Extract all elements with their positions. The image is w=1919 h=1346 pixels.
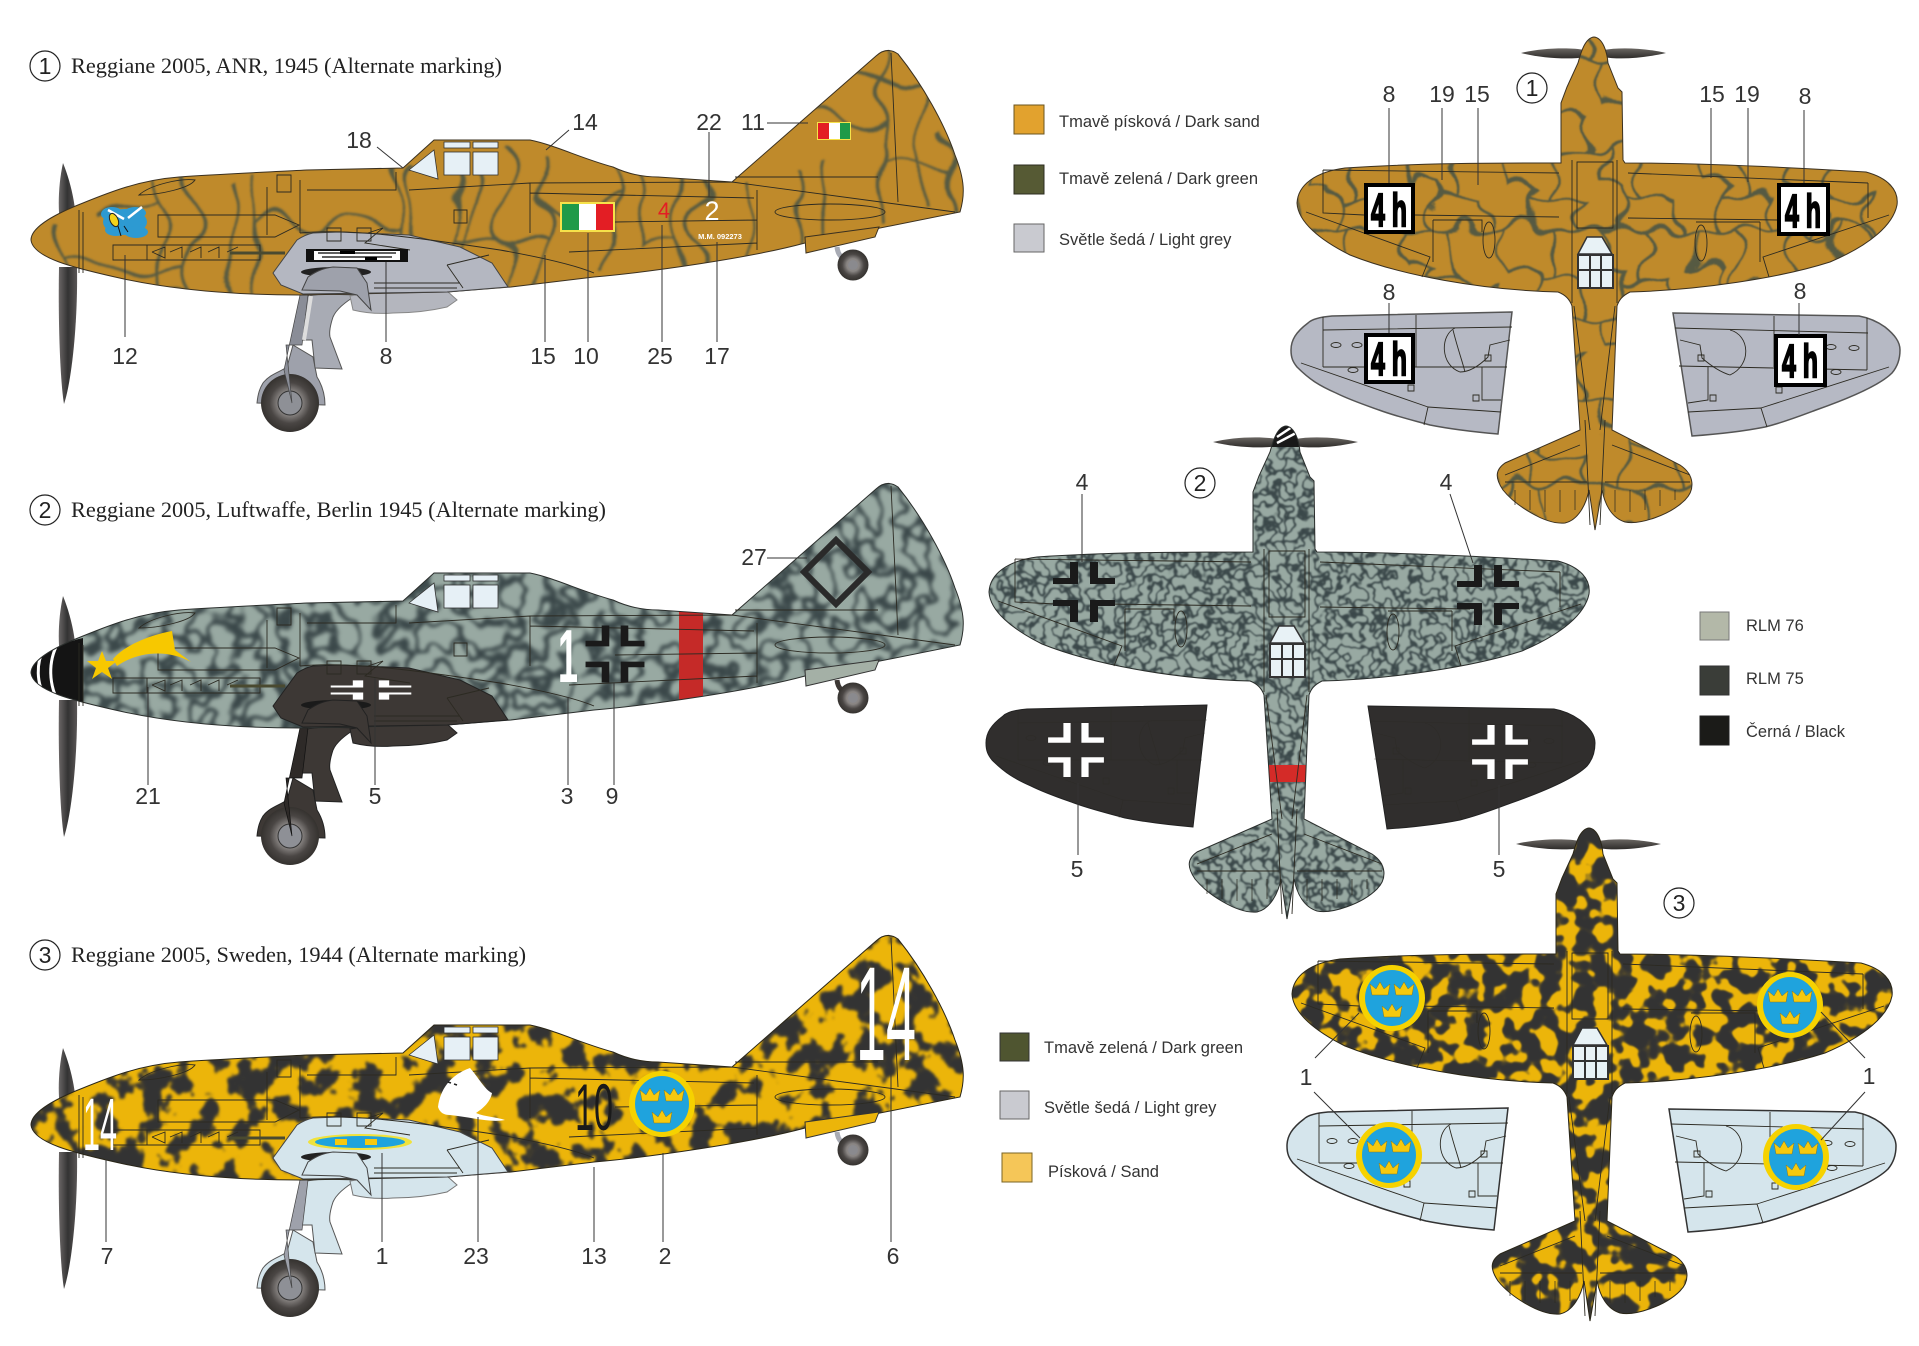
panel: profile 2 side view, grey mottled camouflage: 1 — [558, 614, 578, 698]
radiator under wing — [350, 724, 457, 746]
icon: Italian flag on fin — [817, 122, 851, 140]
tailplane — [805, 227, 879, 253]
marking: roundel, right wing — [1757, 972, 1823, 1038]
marking: roundel, left wing — [1359, 965, 1425, 1031]
tailplane — [805, 1112, 879, 1138]
airframe outline and panel lines — [1297, 37, 1897, 530]
heading: profile 2: Reggiane 2005, Luftwaffe, Berlin 1945 (Alternate marking) — [71, 497, 606, 522]
heading: profile 3: Reggiane 2005, Sweden, 1944 (Alternate marking) — [71, 942, 526, 967]
icon: propeller blades — [59, 596, 77, 837]
panel: profile 2 top view — [982, 419, 1602, 924]
marking: black diamond on fin — [804, 540, 868, 604]
callouts: profile 3 side view: 6 — [887, 1243, 899, 1269]
icon: tail wheel — [837, 1132, 868, 1166]
legend: profile 3 colours: Tmavě zelená / Dark green — [1044, 1039, 1243, 1057]
panel: profile 3 side view, yellow and dark blotches: 14 — [856, 940, 916, 1089]
icon: landing gear, wheel and door — [257, 1179, 357, 1317]
under wing, left, light grey: 4 h — [1371, 333, 1407, 385]
callouts: profile 2 top view: 4 — [1076, 469, 1089, 495]
wing fairing, pale blue — [273, 1117, 508, 1179]
callouts: profile 2 side view: 5 — [369, 783, 381, 809]
canopy — [1578, 237, 1613, 288]
callouts: profile 1 top view: 1 — [1526, 75, 1538, 101]
fuselage outline — [31, 483, 963, 728]
callouts: profile 3 top view: 3 — [1673, 890, 1685, 916]
icon: landing gear, wheel and door — [257, 727, 357, 865]
legend: profile 2 colours: RLM 76 — [1746, 617, 1804, 635]
fuselage camouflage — [20, 473, 970, 733]
icon: landing gear, wheel and door — [257, 294, 357, 432]
callouts: profile 3 top view: 1 — [1863, 1063, 1875, 1089]
legend: profile 1 colours: Tmavě zelená / Dark green — [1059, 170, 1258, 188]
icon: Italian flag on fuselage — [560, 202, 615, 232]
canopy — [1270, 626, 1305, 677]
heading: profile 3: 3 — [39, 942, 51, 968]
canopy glazing — [409, 1027, 498, 1064]
heading: profile 1: 1 — [39, 53, 51, 79]
callouts: profile 2 top view: 2 — [1194, 470, 1206, 496]
marking: flattened roundel on fairing — [308, 1134, 412, 1150]
under wing, right, black — [1368, 706, 1595, 829]
marking: white ghost badge — [438, 1068, 505, 1121]
panel lines — [79, 938, 955, 1173]
panel lines — [79, 486, 955, 721]
airframe camouflage — [1285, 821, 1905, 1326]
fuselage outline — [31, 935, 963, 1180]
icon: propeller blades — [59, 1048, 77, 1289]
canopy glazing — [409, 575, 498, 612]
fuselage numbers and serial: 4 — [658, 198, 670, 223]
marking: fuselage cross — [586, 626, 644, 682]
callouts: profile 1 top view — [1383, 73, 1811, 335]
callouts: profile 1 top view: 15 — [1464, 81, 1490, 107]
panel: profile 3 top view — [1285, 821, 1905, 1326]
legend: profile 1 colours — [1014, 105, 1260, 252]
callouts: profile 2 side view: 9 — [606, 783, 618, 809]
airframe outline and panel lines — [989, 426, 1589, 919]
radiator under wing — [350, 291, 457, 313]
heading: profile 2: 2 — [39, 497, 51, 523]
panel: profile 3 side view, yellow and dark blotches: 14 — [83, 1083, 117, 1166]
marking: wing code square, left — [1366, 184, 1413, 236]
callouts: profile 3 side view: 1 — [376, 1243, 388, 1269]
callouts: profile 3 side view: 2 — [659, 1243, 671, 1269]
callouts: profile 2 top view: 4 — [1440, 469, 1453, 495]
airframe camouflage — [1290, 30, 1910, 535]
fuselage camouflage — [20, 925, 970, 1185]
callouts: profile 1 top view: 8 — [1383, 81, 1395, 107]
marking: white cross on fairing — [331, 680, 411, 700]
legend: profile 3 colours — [1000, 1033, 1243, 1182]
legend: profile 3 colours: Světle šedá / Light grey — [1044, 1099, 1217, 1117]
fuselage outline — [31, 50, 963, 295]
panel: profile 2 side view, grey mottled camouflage — [20, 473, 970, 865]
fairing marking — [306, 249, 408, 262]
panel: profile 3 side view, yellow and dark blotches — [20, 925, 970, 1317]
callouts: profile 1 side view: 11 — [741, 109, 765, 135]
legend: profile 1 colours: Světle šedá / Light grey — [1059, 231, 1232, 249]
callouts: profile 1 top view: 8 — [1799, 83, 1811, 109]
marking: roundel, right under wing — [1763, 1124, 1829, 1190]
wheel well cover — [301, 267, 371, 310]
icon: propeller blades — [59, 163, 77, 404]
marking: Swedish roundel on fuselage — [629, 1071, 695, 1137]
marking: wing code square, left: 4 h — [1371, 184, 1407, 236]
panel: profile 1 top view — [1290, 30, 1910, 535]
callouts: profile 3 top view — [1300, 888, 1875, 1140]
fuselage numbers and serial — [658, 196, 742, 241]
under wing, right, light grey: 4 h — [1782, 335, 1818, 387]
callouts: profile 2 top view: 5 — [1493, 856, 1505, 882]
fuselage camouflage — [20, 40, 970, 300]
wheel well cover — [301, 700, 371, 743]
callouts: profile 2 side view: 21 — [135, 783, 161, 809]
fuselage numbers and serial: 2 — [704, 196, 720, 226]
icon: propeller from above — [1516, 839, 1661, 849]
marking: roundel, left under wing — [1356, 1122, 1422, 1188]
callouts: profile 1 top view: 8 — [1383, 279, 1395, 305]
radiator under wing — [350, 1176, 457, 1198]
wheel well cover — [301, 1152, 371, 1195]
callouts: profile 2 top view: 5 — [1071, 856, 1083, 882]
callouts: profile 1 side view: 12 — [112, 343, 138, 369]
callouts: profile 2 side view: 27 — [741, 544, 767, 570]
marking: wing code square, right: 4 h — [1785, 185, 1821, 237]
marking: wing code square, right — [1779, 185, 1828, 237]
callouts: profile 3 top view: 1 — [1300, 1064, 1312, 1090]
callouts: profile 1 top view: 19 — [1734, 81, 1760, 107]
marking: white cross, left under wing — [1048, 723, 1104, 777]
marking: black number 10: 10 — [575, 1070, 613, 1144]
callouts: profile 1 top view: 15 — [1699, 81, 1725, 107]
legend: profile 2 colours — [1700, 612, 1846, 745]
callouts: profile 2 top view — [1071, 468, 1505, 882]
callouts: profile 1 side view: 18 — [346, 127, 372, 153]
airframe outline and panel lines — [1292, 828, 1892, 1321]
legend: profile 1 colours: Tmavě písková / Dark sand — [1059, 113, 1260, 131]
callouts: profile 1 top view: 8 — [1794, 278, 1806, 304]
callouts: profile 1 side view: 14 — [572, 109, 598, 135]
callouts: profile 1 side view — [112, 109, 808, 369]
wing fairing, black — [273, 665, 508, 727]
canopy — [1573, 1028, 1608, 1079]
callouts: profile 1 side view: 10 — [573, 343, 599, 369]
legend: profile 3 colours: Písková / Sand — [1048, 1163, 1159, 1181]
callouts: profile 3 side view: 23 — [463, 1243, 489, 1269]
callouts: profile 1 side view: 15 — [530, 343, 556, 369]
under wing, right, light grey — [1673, 313, 1900, 436]
under wing, left, pale blue — [1287, 1108, 1508, 1230]
icon: wasp badge on blue cloud — [101, 207, 148, 238]
icon: propeller from above — [1213, 437, 1358, 447]
callouts: profile 3 side view: 13 — [581, 1243, 607, 1269]
callouts: profile 1 side view: 22 — [696, 109, 722, 135]
icon: tail wheel — [837, 680, 868, 714]
callouts: profile 3 side view — [101, 1057, 899, 1269]
callouts: profile 1 side view: 17 — [704, 343, 730, 369]
under wing, left, light grey — [1291, 312, 1512, 434]
panel lines — [79, 53, 955, 288]
callouts: profile 1 top view: 19 — [1429, 81, 1455, 107]
under wing, left, black — [986, 705, 1207, 827]
icon: tail wheel — [837, 247, 868, 280]
callouts: profile 1 side view: 25 — [647, 343, 673, 369]
fuselage numbers and serial: M.M. 092273 — [698, 232, 742, 241]
icon: propeller from above — [1521, 48, 1666, 58]
legend: profile 2 colours: Černá / Black — [1746, 722, 1846, 741]
wing fairing, light grey — [273, 232, 508, 294]
marking: wing cross, right — [1457, 565, 1519, 625]
marking: wing cross, left — [1053, 562, 1115, 622]
under wing, right, pale blue — [1669, 1109, 1896, 1232]
callouts: profile 1 side view: 8 — [380, 343, 392, 369]
legend: profile 2 colours: RLM 75 — [1746, 670, 1804, 688]
tailplane — [805, 660, 879, 686]
panel: profile 1 side view, dark sand with squiggle camouflage — [20, 40, 970, 432]
callouts: profile 2 side view — [135, 544, 807, 809]
callouts: profile 2 side view: 3 — [561, 783, 573, 809]
marking: white cross, right under wing — [1472, 725, 1528, 779]
icon: shooting star badge — [87, 631, 191, 679]
callouts: profile 3 side view: 7 — [101, 1243, 113, 1269]
heading: profile 1: Reggiane 2005, ANR, 1945 (Alternate marking) — [71, 53, 502, 78]
airframe camouflage — [982, 419, 1602, 924]
canopy glazing — [409, 142, 498, 179]
